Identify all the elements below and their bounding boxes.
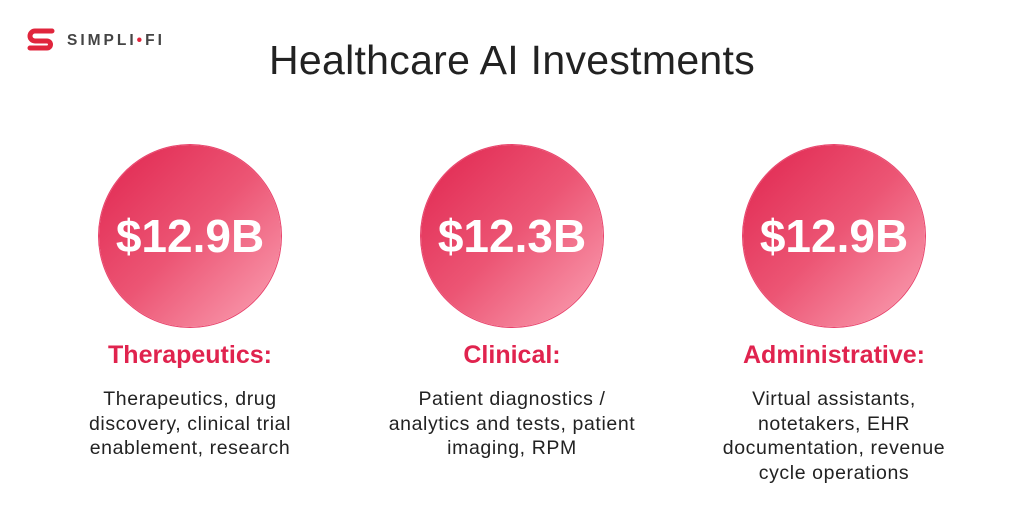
panel: administrative: Administrative: [743, 341, 925, 369]
circle: administrative: $12.9B [760, 210, 908, 262]
circle: clinical [421, 145, 603, 327]
panel: therapeutics [89, 341, 291, 459]
panel: therapeutics: Therapeutics, drug [103, 388, 277, 410]
circle: administrative [743, 145, 925, 327]
panel: therapeutics: discovery, clinical trial [89, 413, 291, 435]
panel: administrative: notetakers, EHR [758, 413, 910, 435]
panel: clinical [389, 341, 635, 459]
circle: clinical: $12.3B [438, 210, 586, 262]
logo [28, 28, 165, 50]
icon: logo S [28, 28, 54, 50]
panel: clinical: Patient diagnostics / [418, 388, 606, 410]
panel: therapeutics: enablement, research [90, 437, 290, 459]
logo text: SIMPLI•FI [67, 32, 165, 49]
panel: administrative [723, 341, 945, 484]
circle: therapeutics: $12.9B [116, 210, 264, 262]
circle: therapeutics [99, 145, 281, 327]
panel: therapeutics: Therapeutics: [108, 341, 272, 369]
panel: clinical: analytics and tests, patient [389, 413, 635, 435]
panel: administrative: Virtual assistants, [752, 388, 916, 410]
panel: clinical: imaging, RPM [447, 437, 577, 459]
panel: administrative: cycle operations [759, 462, 909, 484]
panel: clinical: Clinical: [463, 341, 561, 369]
panel: administrative: documentation, revenue [723, 437, 945, 459]
title: Healthcare AI Investments [269, 37, 755, 83]
